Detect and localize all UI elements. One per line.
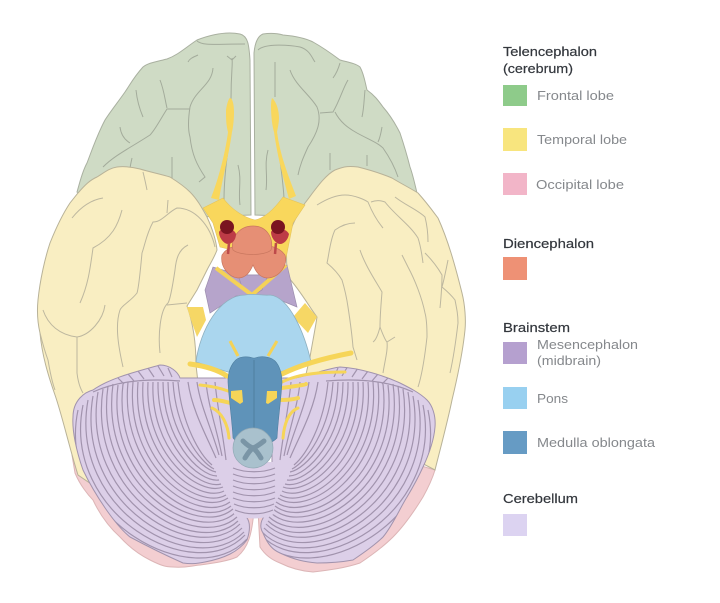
olfactory tract and bulb, right xyxy=(271,98,296,199)
frontal lobes xyxy=(77,33,417,220)
legend group: brainstem xyxy=(503,320,656,454)
legend group: brainstem: Pons xyxy=(537,391,569,406)
right yellow temporal pole xyxy=(293,303,317,333)
yellow cranial structures behind midbrain xyxy=(203,197,305,263)
legend group: brainstem: Medulla oblongata xyxy=(537,435,656,450)
diencephalon xyxy=(222,226,286,278)
legend group: telencephalon: Frontal lobe xyxy=(537,88,614,103)
legend group: telencephalon: Temporal lobe xyxy=(537,132,627,147)
legend group: brainstem: (midbrain) xyxy=(537,353,601,368)
infographic canvas xyxy=(37,32,655,572)
legend group: cerebellum xyxy=(503,491,578,536)
legend group: telencephalon: Occipital lobe xyxy=(536,177,624,192)
legend group: cerebellum: Cerebellum xyxy=(503,491,578,506)
pons xyxy=(196,294,311,372)
cerebellum xyxy=(73,365,435,564)
cranial nerves xyxy=(190,353,351,438)
spinal cord section xyxy=(233,428,273,468)
left yellow temporal pole xyxy=(187,307,206,337)
medulla oblongata xyxy=(228,357,282,446)
legend xyxy=(503,44,656,536)
optic structure, left, red xyxy=(219,220,236,254)
legend group: brainstem: Mesencephalon xyxy=(537,337,638,352)
legend group: brainstem: Brainstem xyxy=(503,320,570,335)
cerebral peduncle bands xyxy=(216,265,286,295)
legend group: telencephalon xyxy=(503,44,627,195)
midbrain xyxy=(205,265,297,313)
brain diagram xyxy=(37,33,465,572)
vermis xyxy=(232,462,276,518)
temporal lobes xyxy=(37,166,465,490)
legend group: telencephalon: Telencephalon xyxy=(503,44,597,59)
occipital lobes xyxy=(72,430,435,572)
legend group: diencephalon: Diencephalon xyxy=(503,236,594,251)
optic structure, right, red xyxy=(271,220,289,254)
legend group: telencephalon: (cerebrum) xyxy=(503,61,573,76)
legend group: diencephalon xyxy=(503,236,594,280)
olfactory tract and bulb, left xyxy=(211,98,234,200)
